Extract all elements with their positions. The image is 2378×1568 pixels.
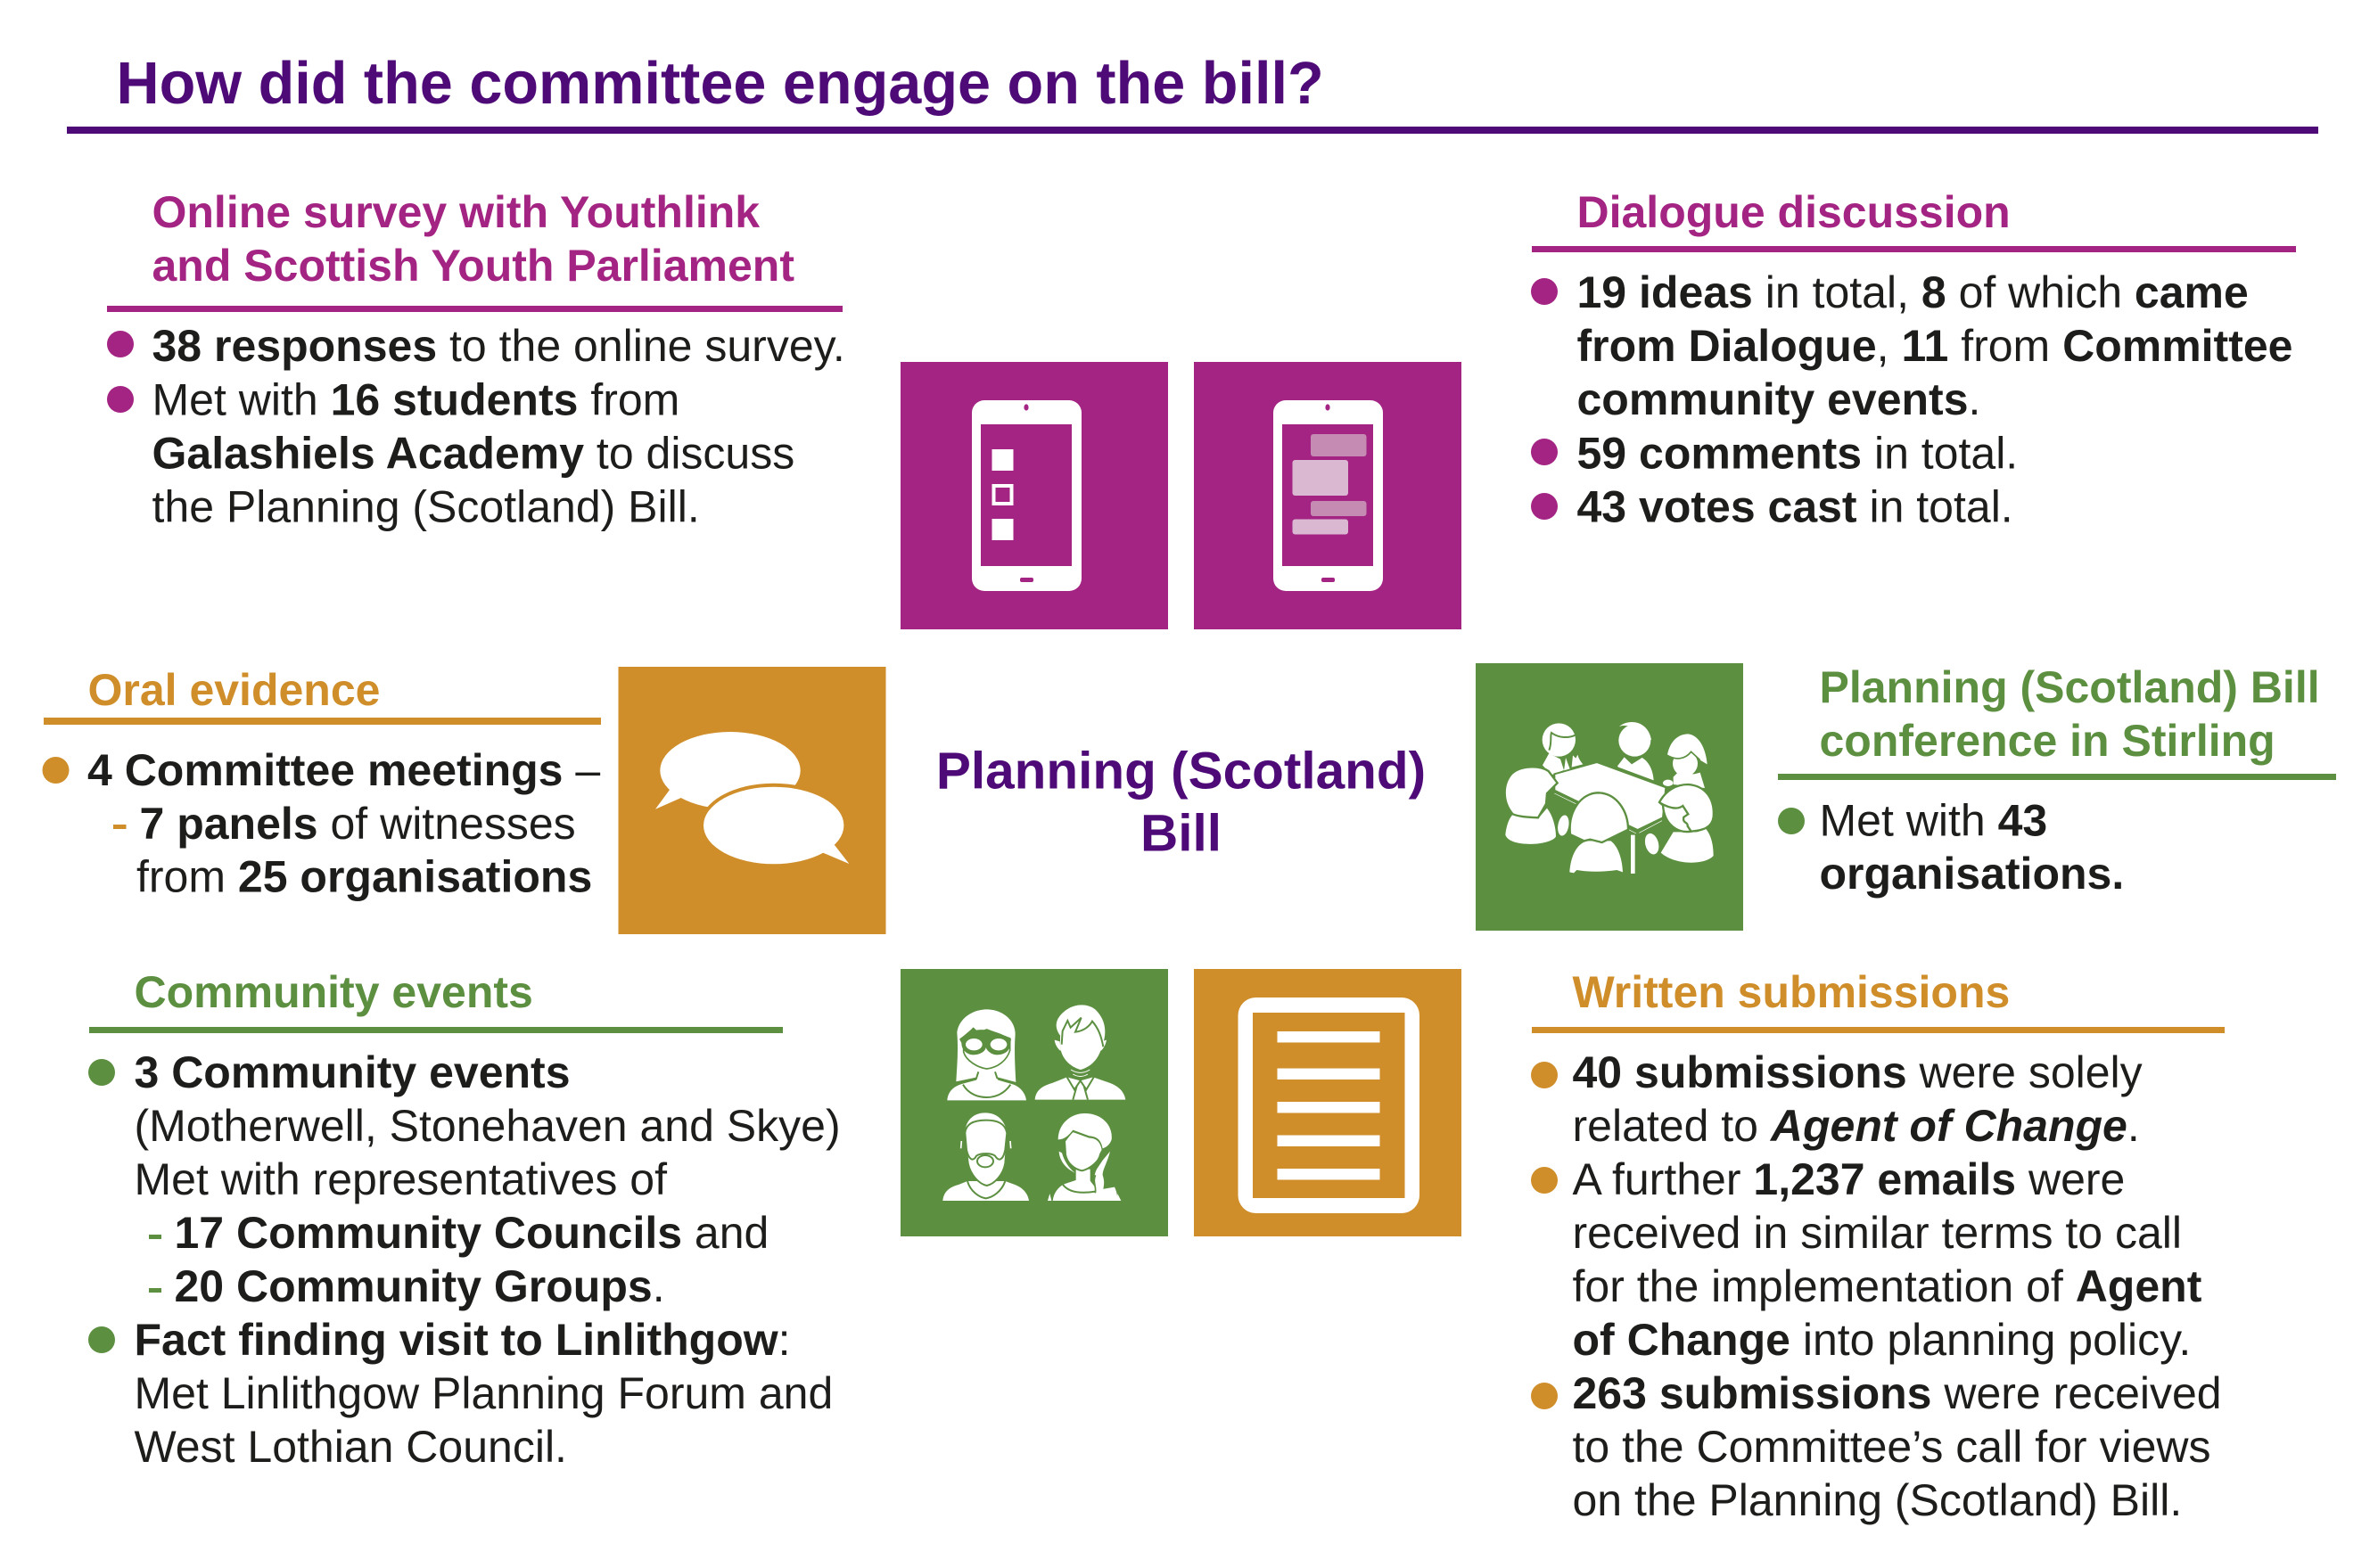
list: online survey facts: Met with 16 students from — [152, 374, 679, 424]
panel: written submissions — [1531, 967, 2225, 1525]
list: conference facts: organisations. — [1819, 849, 2124, 899]
panel: oral evidence — [43, 665, 601, 902]
heading: online survey: Online survey with Youthlink — [152, 187, 760, 237]
list: written submissions facts: on the Planning (Scotland) Bill. — [1573, 1475, 2182, 1525]
list: community events facts: 17 Community Councils and — [175, 1208, 769, 1258]
centre label: Planning (Scotland) Bill: Bill — [1140, 804, 1222, 863]
list: oral evidence facts: 4 Committee meetings – — [87, 745, 600, 795]
heading: community events — [89, 967, 783, 1033]
heading: dialogue discussion — [1532, 187, 2296, 252]
heading: written submissions: Written submissions — [1573, 967, 2010, 1017]
list: written submissions facts: related to Agent of Change. — [1573, 1101, 2140, 1151]
list: community events facts: Fact finding visit to Linlithgow: — [134, 1315, 791, 1365]
heading: oral evidence: Oral evidence — [87, 665, 380, 715]
heading: community events: Community events — [134, 967, 533, 1017]
list: online survey facts: Galashiels Academy to discuss — [152, 428, 794, 478]
heading: conference in Stirling: conference in Stirling — [1819, 716, 2275, 766]
list: written submissions facts: received in similar terms to call — [1573, 1208, 2182, 1258]
list: community events facts: 20 Community Groups. — [175, 1261, 665, 1311]
icon: speech bubbles — [619, 667, 886, 934]
panel: conference in Stirling — [1778, 662, 2336, 899]
list: community events facts: Met Linlithgow Planning Forum and — [134, 1368, 833, 1418]
heading: online survey: and Scottish Youth Parliament — [152, 241, 794, 291]
centre label: Planning (Scotland) Bill: Planning (Scotland) — [936, 742, 1426, 800]
list: community events facts — [88, 1047, 841, 1472]
list: written submissions facts: 263 submissions were received — [1573, 1368, 2222, 1418]
list: written submissions facts — [1531, 1047, 2222, 1525]
list: oral evidence facts — [43, 745, 600, 902]
heading: oral evidence — [44, 665, 601, 725]
list: written submissions facts: 40 submissions were solely — [1573, 1047, 2143, 1097]
list: conference facts: Met with 43 — [1819, 795, 2047, 845]
panel: online survey — [107, 187, 845, 531]
list: dialogue facts: 59 comments in total. — [1576, 428, 2018, 478]
icon: phone with chat messages — [1194, 362, 1461, 629]
list: oral evidence facts: 7 panels of witnesses — [139, 799, 576, 849]
list: written submissions facts: of Change into planning policy. — [1573, 1315, 2191, 1365]
icon: phone with survey checkboxes — [901, 362, 1168, 629]
heading: dialogue discussion: Dialogue discussion — [1576, 187, 2011, 237]
list: community events facts: Met with representatives of — [134, 1154, 667, 1204]
panel: dialogue discussion — [1531, 187, 2296, 531]
title — [67, 51, 2318, 134]
list: written submissions facts: for the implementation of Agent — [1573, 1261, 2202, 1311]
list: written submissions facts: A further 1,237 emails were — [1573, 1154, 2125, 1204]
list: online survey facts: 38 responses to the online survey. — [152, 321, 845, 371]
heading: written submissions — [1532, 967, 2225, 1033]
list: oral evidence facts: from 25 organisations — [136, 852, 592, 902]
list: community events facts: (Motherwell, Stonehaven and Skye) — [134, 1101, 841, 1151]
list: dialogue facts: community events. — [1576, 374, 1980, 424]
list: online survey facts — [107, 321, 845, 531]
centre label: Planning (Scotland) Bill — [936, 742, 1426, 863]
list: written submissions facts: to the Committee’s call for views — [1573, 1422, 2211, 1472]
list: dialogue facts — [1531, 267, 2292, 531]
panel: community events — [88, 967, 841, 1472]
list: community events facts: West Lothian Council. — [134, 1422, 567, 1472]
heading: conference in Stirling — [1778, 662, 2336, 780]
icon: four community members — [901, 969, 1168, 1236]
icon: people around a meeting table — [1476, 663, 1743, 931]
list: dialogue facts: 19 ideas in total, 8 of which came — [1576, 267, 2249, 317]
heading: online survey — [107, 187, 843, 312]
icon: document — [1194, 969, 1461, 1236]
list: conference facts — [1778, 795, 2124, 899]
list: dialogue facts: 43 votes cast in total. — [1576, 481, 2013, 531]
title: How did the committee engage on the bill? — [116, 51, 1324, 117]
list: online survey facts: the Planning (Scotland) Bill. — [152, 481, 700, 531]
list: community events facts: 3 Community events — [134, 1047, 571, 1097]
heading: conference in Stirling: Planning (Scotland) Bill — [1819, 662, 2320, 712]
list: dialogue facts: from Dialogue, 11 from Committee — [1576, 321, 2292, 371]
